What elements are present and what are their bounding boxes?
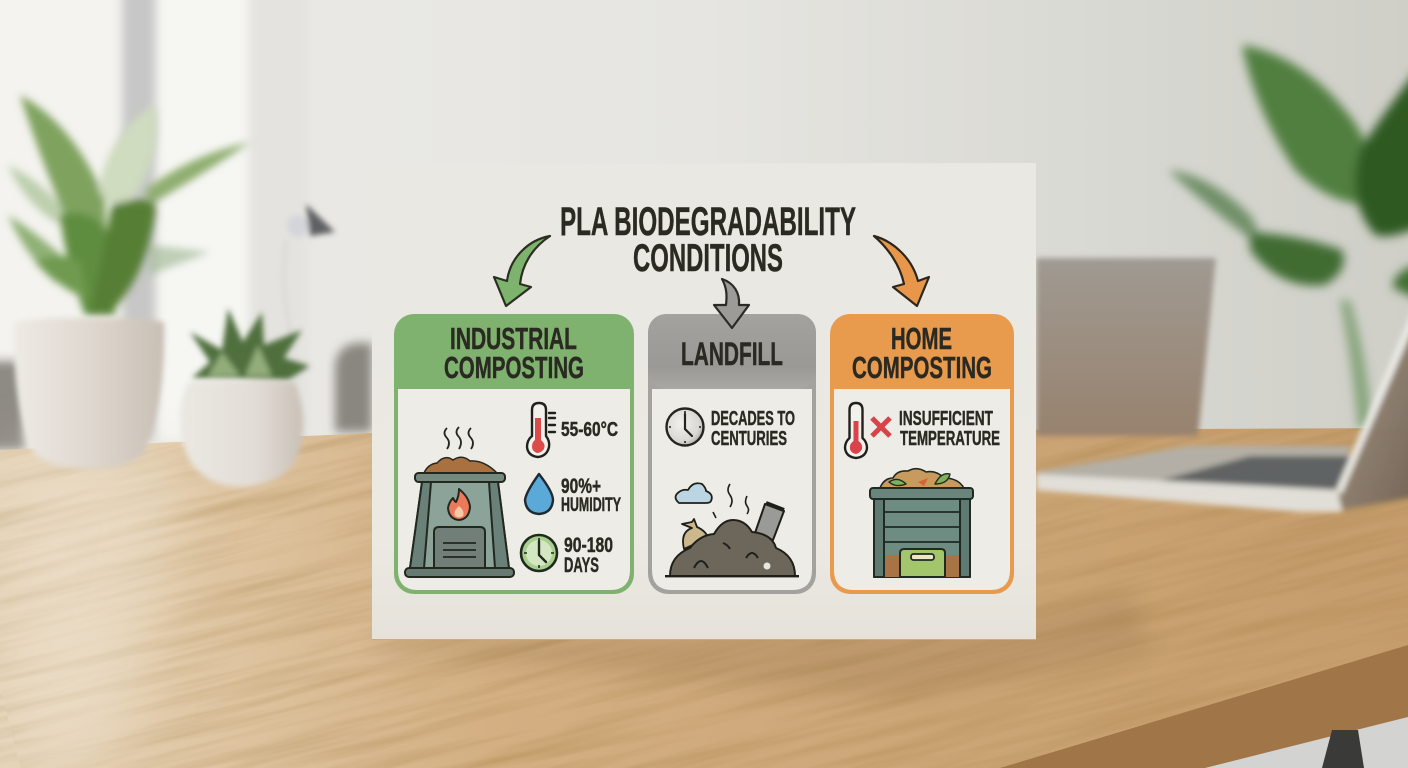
icon: landfill mound [665, 483, 799, 577]
label: humidity: 90%+ [561, 475, 601, 498]
panel: industrial composting [394, 314, 634, 594]
icon: industrial composter [405, 427, 514, 577]
heading: INDUSTRIAL [450, 321, 577, 356]
label: duration: DAYS [564, 554, 599, 577]
icon: clock [521, 535, 557, 571]
icon: steam [444, 427, 473, 449]
label: decomposition time: CENTURIES [711, 428, 787, 450]
paper card [372, 163, 1036, 640]
blurred desk lamp [284, 204, 335, 340]
panel: landfill [648, 314, 816, 594]
panel: home composting [830, 314, 1014, 594]
label: insufficient temperature: TEMPERATURE [900, 428, 1000, 450]
label: duration [564, 534, 613, 577]
title [560, 200, 856, 280]
heading: COMPOSTING [852, 350, 992, 385]
label: decomposition time: DECADES TO [711, 408, 795, 430]
label: duration: 90-180 [564, 534, 613, 557]
panel frame [648, 314, 816, 594]
heading: HOME [891, 321, 952, 356]
title: PLA BIODEGRADABILITY [560, 200, 856, 244]
title: CONDITIONS [633, 237, 783, 280]
small white pot [180, 380, 303, 487]
label: humidity [561, 475, 621, 516]
label: temperature: 55-60°C [561, 419, 618, 441]
icon: clock [666, 408, 704, 446]
foreground laptop [1036, 280, 1408, 512]
heading [852, 321, 992, 385]
label: insufficient temperature: INSUFFICIENT [899, 408, 993, 430]
right blurred laptop behind card [1036, 258, 1216, 436]
icon: red cross [872, 418, 890, 436]
succulent in small pot [180, 308, 310, 487]
arrow: to home composting [874, 236, 929, 306]
panel frame [830, 314, 1014, 594]
panel frame [394, 314, 634, 594]
heading [444, 321, 584, 385]
large white pot [14, 318, 164, 469]
wooden table [0, 428, 1408, 768]
icon: thermometer [527, 403, 555, 457]
label: insufficient temperature [899, 408, 1000, 450]
heading: COMPOSTING [444, 350, 584, 385]
right plant [1168, 45, 1408, 428]
icon: water drop [525, 474, 553, 514]
heading: LANDFILL [681, 336, 783, 372]
arrow: to industrial composting [494, 236, 550, 306]
label: decomposition time [711, 408, 795, 450]
icon: thermometer [845, 403, 867, 458]
label: humidity: HUMIDITY [561, 495, 621, 516]
icon: home compost bin [870, 469, 973, 577]
left plant in white pot [8, 95, 250, 469]
arrow: to landfill [714, 279, 749, 328]
